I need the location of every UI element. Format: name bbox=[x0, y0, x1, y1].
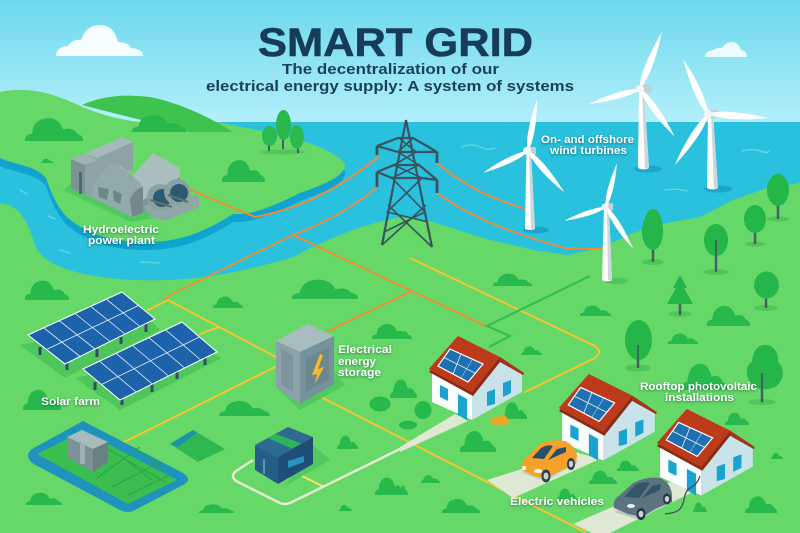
pylon bbox=[377, 120, 437, 247]
cloud: right bbox=[705, 42, 747, 57]
power lines: yellow distribution bbox=[124, 258, 599, 532]
turbine: foreground on land bbox=[563, 163, 636, 284]
substation with field bbox=[28, 421, 188, 512]
bushes bbox=[23, 115, 783, 513]
turbine: back right bbox=[672, 58, 768, 192]
icon: lightning bolt bbox=[312, 354, 324, 384]
package by first house bbox=[490, 414, 509, 426]
driveways: second and third houses bbox=[487, 452, 697, 533]
land: peninsula bbox=[0, 90, 345, 242]
label: wind turbines bbox=[541, 134, 634, 157]
subtitle: electrical energy supply: A system of systems bbox=[206, 78, 574, 95]
hydroelectric power plant bbox=[63, 137, 199, 222]
label: hydroelectric power plant: power plant bbox=[88, 235, 155, 247]
label: electrical energy storage: Electrical bbox=[338, 344, 392, 356]
green patch bbox=[170, 430, 225, 462]
trees: right shore and meadow bbox=[625, 174, 789, 405]
line: green connector bbox=[487, 276, 590, 347]
house: second bbox=[559, 374, 657, 461]
label: electrical energy storage: storage bbox=[338, 367, 381, 379]
label: electrical energy storage: energy bbox=[338, 356, 377, 368]
electric car: orange bbox=[521, 440, 578, 482]
battery building bbox=[255, 427, 330, 486]
trees: left hill bbox=[261, 110, 305, 154]
path: cream loop road bbox=[233, 415, 465, 504]
label: rooftop photovoltaic installations: installations bbox=[665, 392, 734, 404]
house: first bbox=[429, 336, 524, 420]
hill: left back crest bbox=[82, 96, 233, 132]
label: wind turbines: On- and offshore bbox=[541, 134, 634, 146]
label: solar farm: Solar farm bbox=[41, 396, 100, 408]
title: SMART GRID bbox=[258, 21, 533, 65]
cloud: left bbox=[56, 25, 143, 56]
subtitle: The decentralization of our bbox=[282, 61, 499, 78]
label: electrical energy storage bbox=[338, 344, 392, 379]
land: main lower ground bbox=[0, 183, 800, 533]
label: rooftop photovoltaic installations bbox=[640, 381, 757, 404]
solar farm: panel arrays bbox=[20, 292, 222, 410]
sea ripples bbox=[20, 145, 769, 263]
turbine: near left bbox=[482, 99, 567, 234]
charging cable bbox=[665, 476, 700, 514]
house: third bbox=[657, 409, 755, 496]
power lines: orange transmission bbox=[165, 157, 603, 331]
subtitle bbox=[206, 61, 574, 95]
label: wind turbines: wind turbines bbox=[549, 145, 627, 157]
teal edge of patch bbox=[170, 430, 197, 447]
electrical energy storage unit bbox=[276, 324, 345, 410]
label: hydroelectric power plant bbox=[83, 224, 159, 247]
label: rooftop photovoltaic installations: Rooftop photovoltaic bbox=[640, 381, 757, 393]
electric car: grey bbox=[614, 478, 672, 520]
sky background bbox=[0, 0, 800, 125]
river shadow bank bbox=[0, 98, 345, 250]
sea and river bbox=[0, 122, 800, 292]
label: electric vehicles: Electric vehicles bbox=[510, 496, 604, 508]
label: hydroelectric power plant: Hydroelectric bbox=[83, 224, 159, 236]
driveway: first house bbox=[400, 414, 468, 452]
turbine: back centre bbox=[588, 31, 678, 173]
